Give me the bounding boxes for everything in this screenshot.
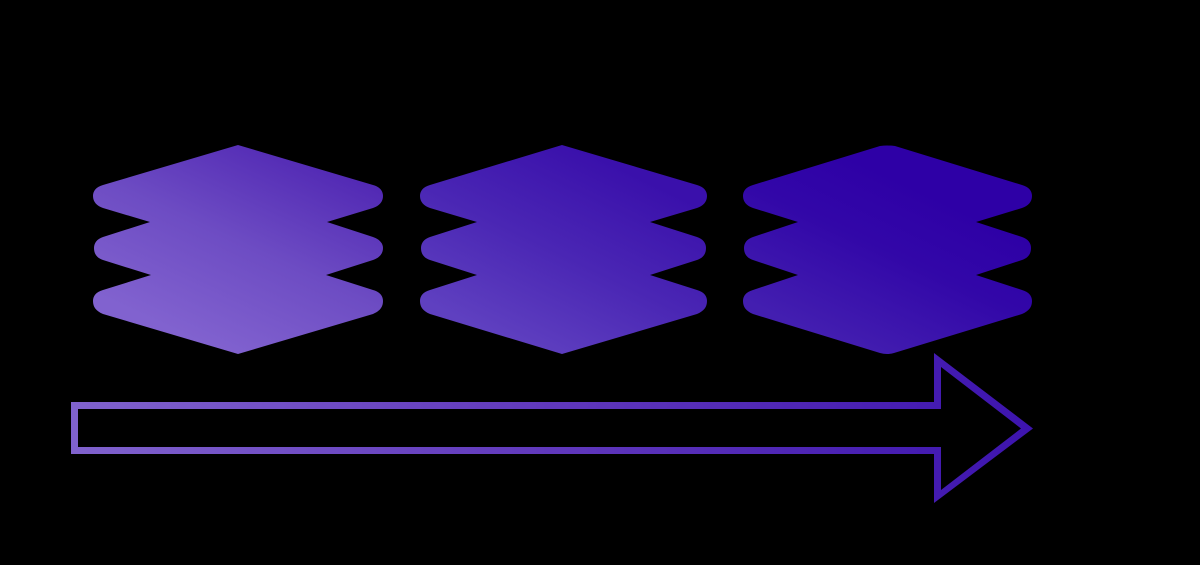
stack 3: deep indigo layers xyxy=(743,146,1032,354)
stack 1: light purple layers xyxy=(93,145,383,354)
arrow: outlined, pointing right xyxy=(71,353,1033,503)
stack 2: medium purple layers xyxy=(420,145,707,354)
